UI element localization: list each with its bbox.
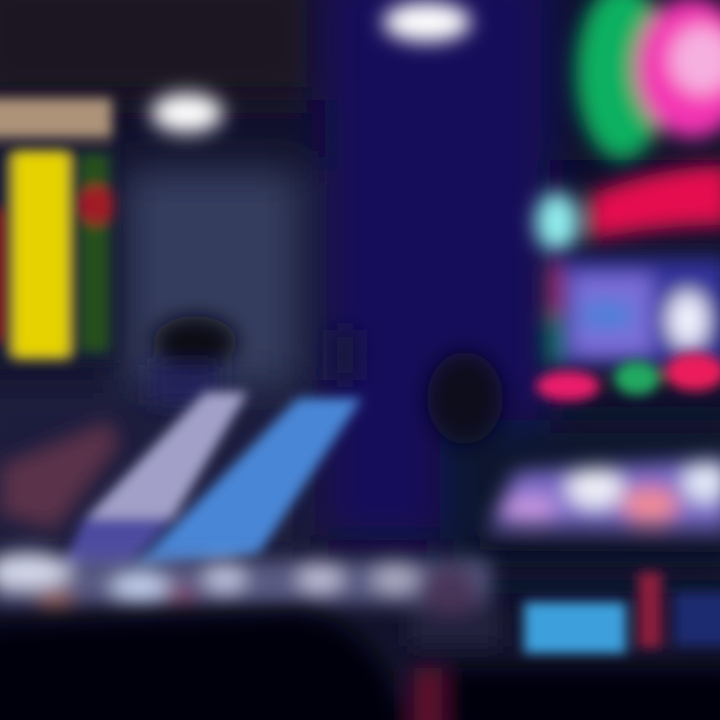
- console table: [480, 458, 720, 551]
- ceiling lamps: [151, 2, 471, 133]
- dark speaker: [330, 330, 503, 444]
- arcade buttons row: [536, 353, 720, 401]
- arcade screen: [547, 258, 720, 366]
- laptop lid panels: [60, 392, 362, 572]
- right neon ring and pink circle: [576, 0, 720, 160]
- foreground silhouettes: [0, 612, 720, 720]
- blue box and red post: [524, 572, 720, 654]
- left banner and hanging flags: [0, 98, 115, 363]
- person at laptop: [0, 316, 237, 530]
- speckled counter strip: [0, 552, 500, 646]
- red neon band and cyan light: [535, 165, 720, 252]
